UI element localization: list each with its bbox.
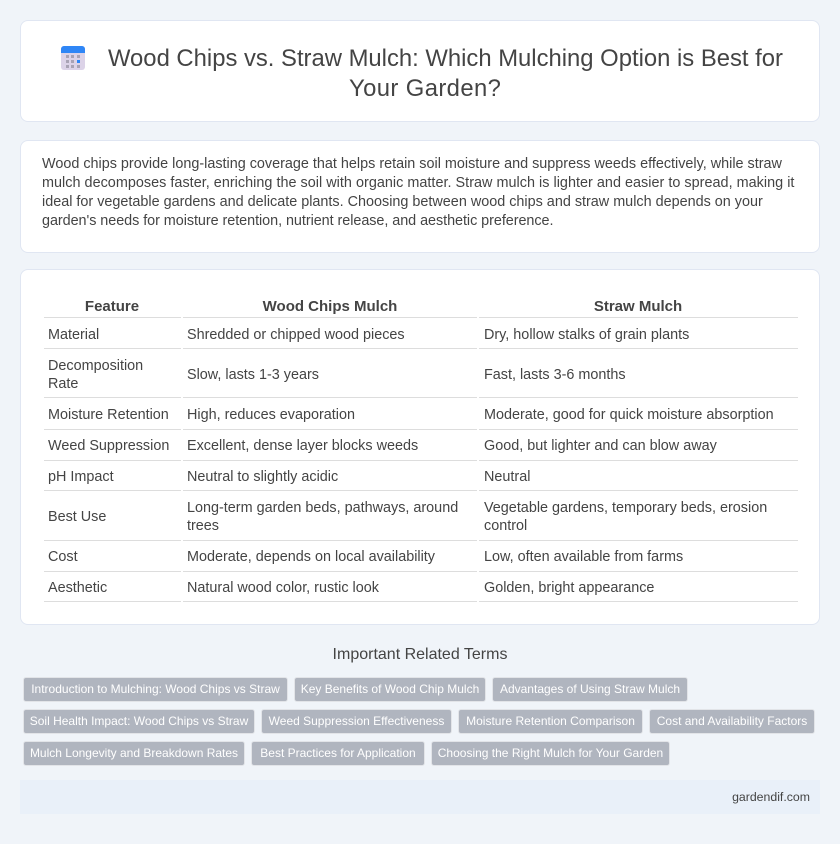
- text block: introduction: mulch decomposes faster, enriching the soil with organic matter. Straw mulch is lighter and easier to spread, making it: [42, 175, 794, 191]
- row: cost: Low, often available from farms: [484, 549, 683, 565]
- row: cost: Cost: [48, 549, 78, 565]
- table header row: [85, 298, 682, 315]
- title: Wood Chips vs. Straw Mulch: Which Mulching Option is Best for: [108, 45, 783, 72]
- row: aesthetic: Natural wood color, rustic look: [187, 580, 379, 596]
- row: best use: [48, 500, 767, 534]
- tag: [23, 741, 245, 766]
- row: material: Material: [48, 327, 99, 343]
- row: cost: Moderate, depends on local availability: [187, 549, 435, 565]
- footer: source: gardendif.com: [732, 790, 810, 804]
- row: material: Dry, hollow stalks of grain plants: [484, 327, 689, 343]
- tag: [23, 677, 288, 702]
- row: moisture retention: High, reduces evaporation: [187, 407, 355, 423]
- row: best use: Vegetable gardens, temporary beds, erosion: [484, 500, 767, 516]
- tag: [492, 677, 688, 702]
- row: pH impact: [48, 469, 530, 485]
- tag: Best Practices for Application: [260, 746, 416, 760]
- text block: introduction: garden's needs for moisture retention, nutrient release, and aesthetic preference.: [42, 213, 553, 229]
- row: aesthetic: Aesthetic: [48, 580, 107, 596]
- row: best use: trees: [187, 518, 219, 534]
- row: weed suppression: [48, 438, 717, 454]
- title: Your Garden?: [349, 75, 501, 102]
- panel: comparison table: [20, 269, 820, 625]
- table header row: Straw Mulch: [594, 298, 682, 315]
- tag: [294, 677, 486, 702]
- tag: [23, 709, 255, 734]
- row: weed suppression: Good, but lighter and can blow away: [484, 438, 717, 454]
- tags: related terms: [23, 677, 815, 766]
- text block: introduction: [42, 156, 794, 229]
- icon: calendar: [61, 46, 85, 70]
- tag: Cost and Availability Factors: [657, 714, 807, 728]
- row: decomposition rate: Decomposition: [48, 358, 143, 374]
- row: decomposition rate: [48, 358, 626, 392]
- tag: Soil Health Impact: Wood Chips vs Straw: [30, 714, 248, 728]
- row: cost: [48, 549, 683, 565]
- row: decomposition rate: Rate: [48, 376, 78, 392]
- row: weed suppression: Excellent, dense layer blocks weeds: [187, 438, 418, 454]
- tag: [251, 741, 425, 766]
- tag: Advantages of Using Straw Mulch: [500, 682, 680, 696]
- table header row: Feature: [85, 298, 139, 315]
- row: best use: control: [484, 518, 527, 534]
- row: material: [48, 327, 689, 343]
- row: moisture retention: Moderate, good for quick moisture absorption: [484, 407, 774, 423]
- text block: introduction: Wood chips provide long-lasting coverage that helps retain soil moisture and suppress weeds effectively, while straw: [42, 156, 782, 172]
- row: weed suppression: Weed Suppression: [48, 438, 169, 454]
- tag: Moisture Retention Comparison: [466, 714, 635, 728]
- row: moisture retention: Moisture Retention: [48, 407, 169, 423]
- tag: [261, 709, 452, 734]
- tag: Choosing the Right Mulch for Your Garden: [438, 746, 663, 760]
- tag: Mulch Longevity and Breakdown Rates: [30, 746, 238, 760]
- comparison table: [44, 298, 798, 602]
- row: pH impact: pH Impact: [48, 469, 114, 485]
- table header row: Wood Chips Mulch: [263, 298, 397, 315]
- tag: [649, 709, 815, 734]
- row: aesthetic: Golden, bright appearance: [484, 580, 654, 596]
- panel: introduction: [20, 140, 820, 253]
- row: decomposition rate: Slow, lasts 1-3 years: [187, 367, 319, 383]
- row: material: Shredded or chipped wood pieces: [187, 327, 405, 343]
- row: best use: Long-term garden beds, pathways, around: [187, 500, 458, 516]
- tag: Introduction to Mulching: Wood Chips vs Straw: [31, 682, 280, 696]
- panel: title card: [20, 20, 820, 122]
- text block: introduction: ideal for vegetable gardens and delicate plants. Choosing between wood chips and straw mulch depends on your: [42, 194, 763, 210]
- row: pH impact: Neutral to slightly acidic: [187, 469, 338, 485]
- tag: Weed Suppression Effectiveness: [269, 714, 444, 728]
- row: best use: Best Use: [48, 509, 106, 525]
- title: [108, 45, 783, 102]
- row: aesthetic: [48, 580, 654, 596]
- row: decomposition rate: Fast, lasts 3-6 months: [484, 367, 626, 383]
- tag: [431, 741, 670, 766]
- tag: Key Benefits of Wood Chip Mulch: [301, 682, 479, 696]
- row: pH impact: Neutral: [484, 469, 530, 485]
- row: moisture retention: [48, 407, 774, 423]
- heading: important related terms: Important Related Terms: [333, 646, 507, 663]
- footer bar: [20, 780, 820, 814]
- tag: [458, 709, 643, 734]
